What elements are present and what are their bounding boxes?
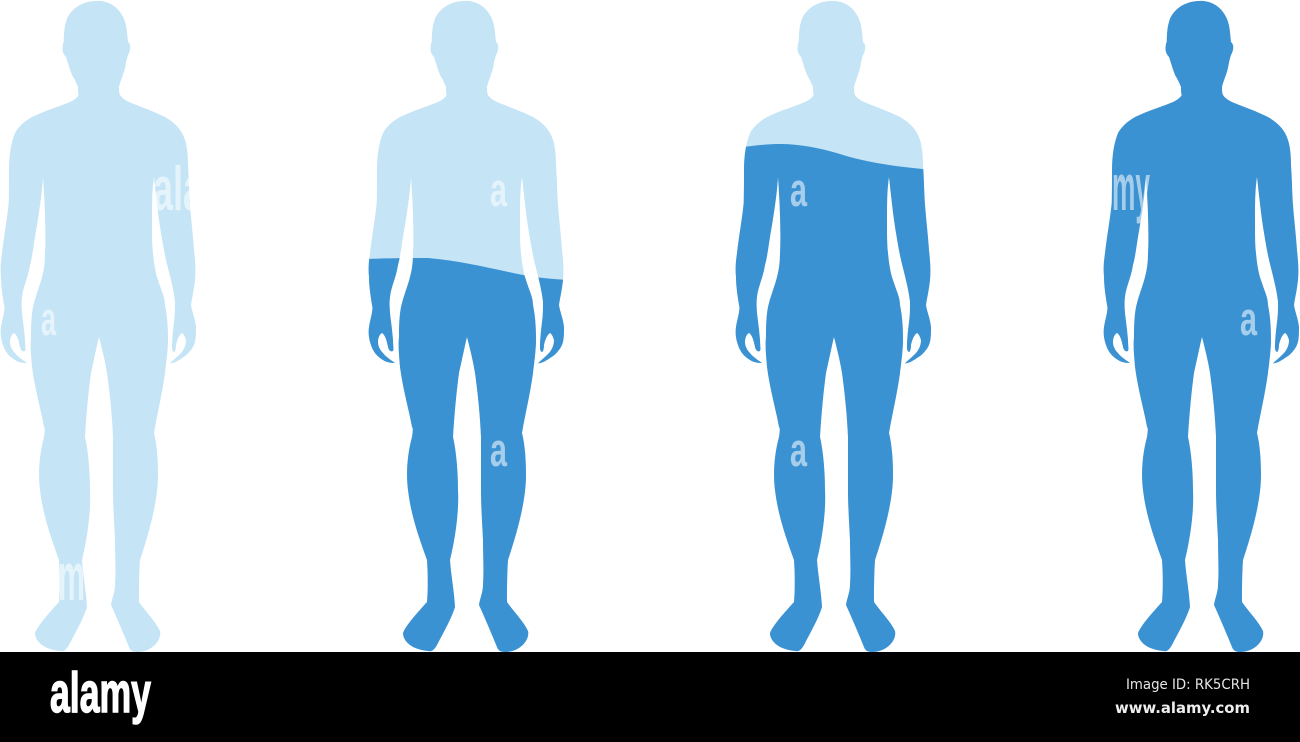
alamy logo: alamy [50, 661, 151, 725]
figure 1: empty body, light blue [1, 1, 196, 652]
watermark fragments over the figures: a [790, 163, 808, 216]
website: www.alamy.com [1115, 699, 1250, 717]
watermark fragments over the figures: a [490, 163, 508, 216]
watermark fragments over the figures: my [1112, 150, 1150, 224]
watermark fragments over the figures [41, 150, 1258, 615]
figure 3: body filled to the chest [736, 1, 931, 652]
watermark fragments over the figures: a [1240, 292, 1258, 345]
watermark fragments over the figures: a [790, 423, 808, 476]
watermark fragments over the figures: a [41, 292, 56, 345]
figure 4: body completely filled [1104, 1, 1299, 652]
watermark fragments over the figures: a [490, 423, 508, 476]
watermark fragments over the figures: m [58, 539, 85, 615]
image id: Image ID: RK5CRH [1126, 677, 1250, 693]
watermark fragments over the figures: ala [153, 155, 203, 224]
figure 2: body filled to the waist [369, 1, 564, 652]
footer bar [0, 652, 1300, 742]
